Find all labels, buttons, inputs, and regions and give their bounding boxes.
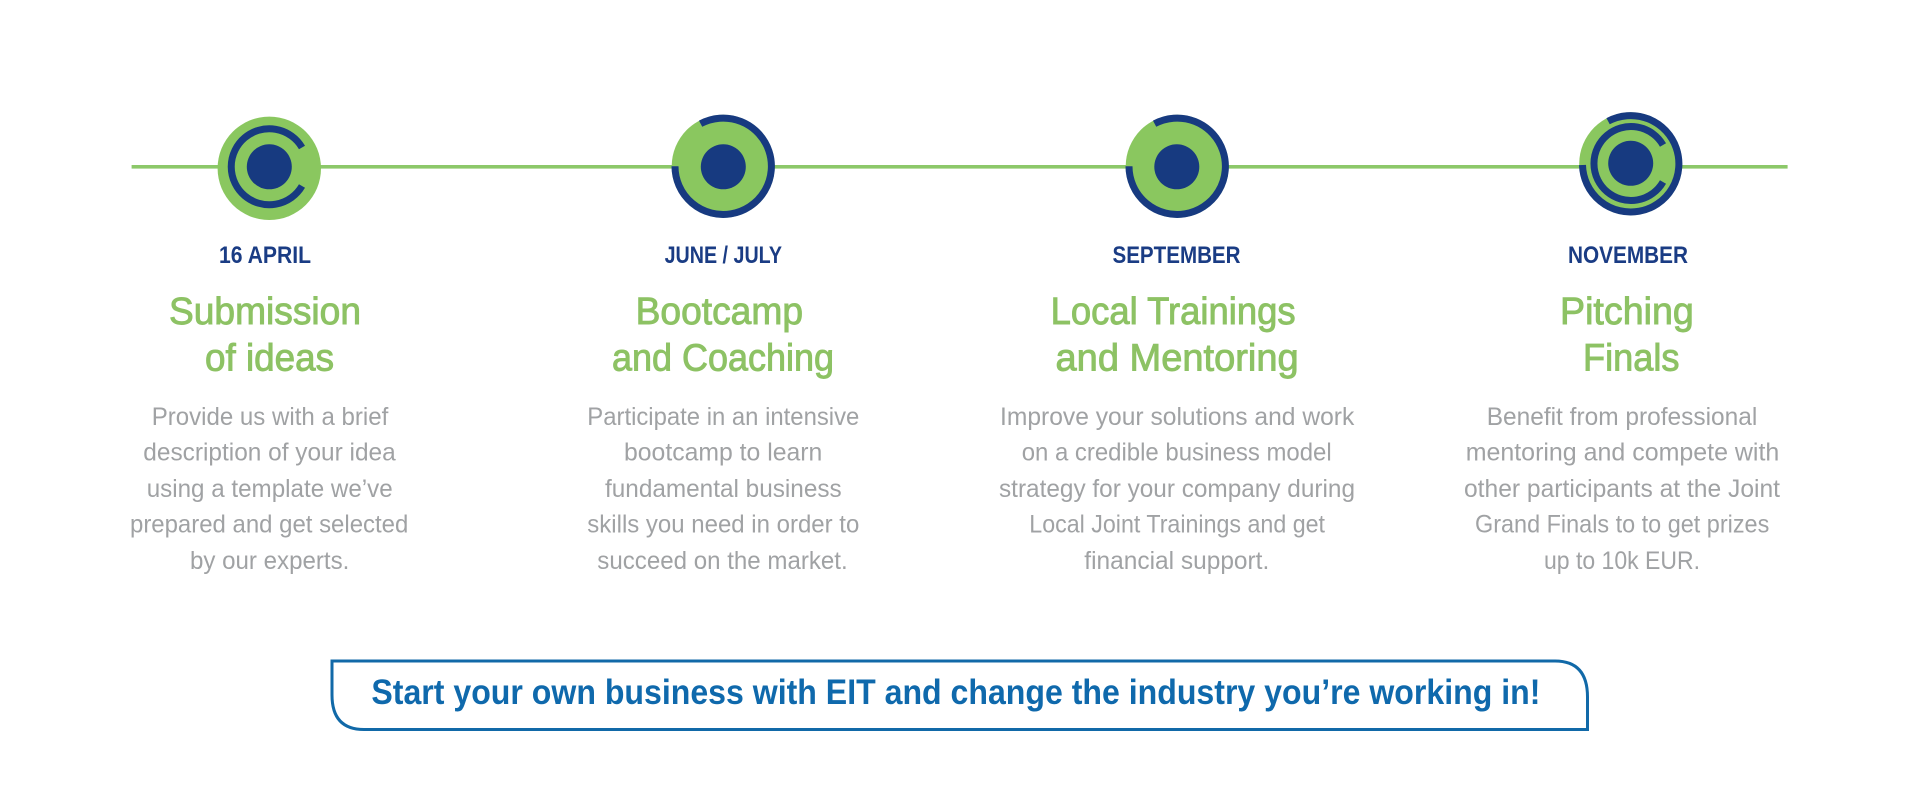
text block: step 4 description <box>1464 403 1780 575</box>
text block: step 1 description: prepared and get selected <box>130 511 408 539</box>
icon: step 3 marker <box>1126 115 1229 218</box>
text block: step 2 description: Participate in an intensive <box>587 403 859 431</box>
text block: step 3 description: on a credible business model <box>1022 439 1332 467</box>
text block: step 3 description <box>999 403 1355 575</box>
text block: step 1 description: Provide us with a brief <box>152 403 388 431</box>
heading: Bootcamp and Coaching: and Coaching <box>612 338 834 380</box>
heading: Bootcamp and Coaching: Bootcamp <box>636 291 803 333</box>
date: November: NOVEMBER <box>1568 242 1688 269</box>
heading: Local Trainings and Mentoring <box>1051 291 1299 380</box>
date: June / July: JUNE / JULY <box>665 242 782 269</box>
panel: step 4 pitching finals <box>1464 112 1780 575</box>
text block: step 4 description: other participants at the Joint <box>1464 475 1780 503</box>
text block: step 3 description: financial support. <box>1084 547 1269 575</box>
date: 16 April: 16 APRIL <box>219 242 311 269</box>
date: September: SEPTEMBER <box>1112 242 1240 269</box>
panel: step 1 submission of ideas <box>130 117 408 575</box>
text block: step 3 description: Improve your solutions and work <box>1000 403 1355 431</box>
text block: step 3 description: strategy for your company during <box>999 475 1355 503</box>
heading: Bootcamp and Coaching <box>612 291 834 380</box>
text block: step 4 description: Grand Finals to to get prizes <box>1475 511 1769 539</box>
heading: Pitching Finals: Finals <box>1583 338 1680 380</box>
heading: Submission of ideas <box>169 291 361 380</box>
text block: step 1 description: using a template we’ve <box>147 475 393 503</box>
text block: step 2 description: bootcamp to learn <box>624 439 822 467</box>
text block: step 1 description: by our experts. <box>190 547 349 575</box>
heading: Pitching Finals <box>1560 291 1694 380</box>
icon: step 4 marker <box>1579 112 1682 215</box>
heading: Submission of ideas: of ideas <box>205 338 334 380</box>
icon: step 2 marker <box>672 115 775 218</box>
heading: Pitching Finals: Pitching <box>1560 291 1694 333</box>
heading: Local Trainings and Mentoring: and Mentoring <box>1056 338 1299 380</box>
text block: step 1 description <box>130 403 408 575</box>
heading: Local Trainings and Mentoring: Local Trainings <box>1051 291 1296 333</box>
banner outline <box>332 661 1588 730</box>
text block: step 1 description: description of your idea <box>143 439 396 467</box>
text block: step 4 description: mentoring and compete with <box>1466 439 1779 467</box>
banner text: Start your own business with EIT and change the industry you’re working in! <box>371 673 1540 712</box>
timeline line <box>132 165 1788 169</box>
heading: Submission of ideas: Submission <box>169 291 361 333</box>
text block: step 4 description: up to 10k EUR. <box>1544 547 1700 575</box>
text block: step 3 description: Local Joint Trainings and get <box>1029 511 1325 539</box>
text block: step 2 description: fundamental business <box>605 475 842 503</box>
text block: step 2 description: skills you need in order to <box>587 511 859 539</box>
text block: step 4 description: Benefit from professional <box>1487 403 1757 431</box>
panel: step 2 bootcamp and coaching <box>587 115 859 575</box>
text block: step 2 description: succeed on the market. <box>597 547 848 575</box>
callout: call to action banner <box>332 661 1588 730</box>
icon: step 1 marker <box>218 117 321 220</box>
panel: step 3 local trainings and mentoring <box>999 115 1355 575</box>
text block: step 2 description <box>587 403 859 575</box>
